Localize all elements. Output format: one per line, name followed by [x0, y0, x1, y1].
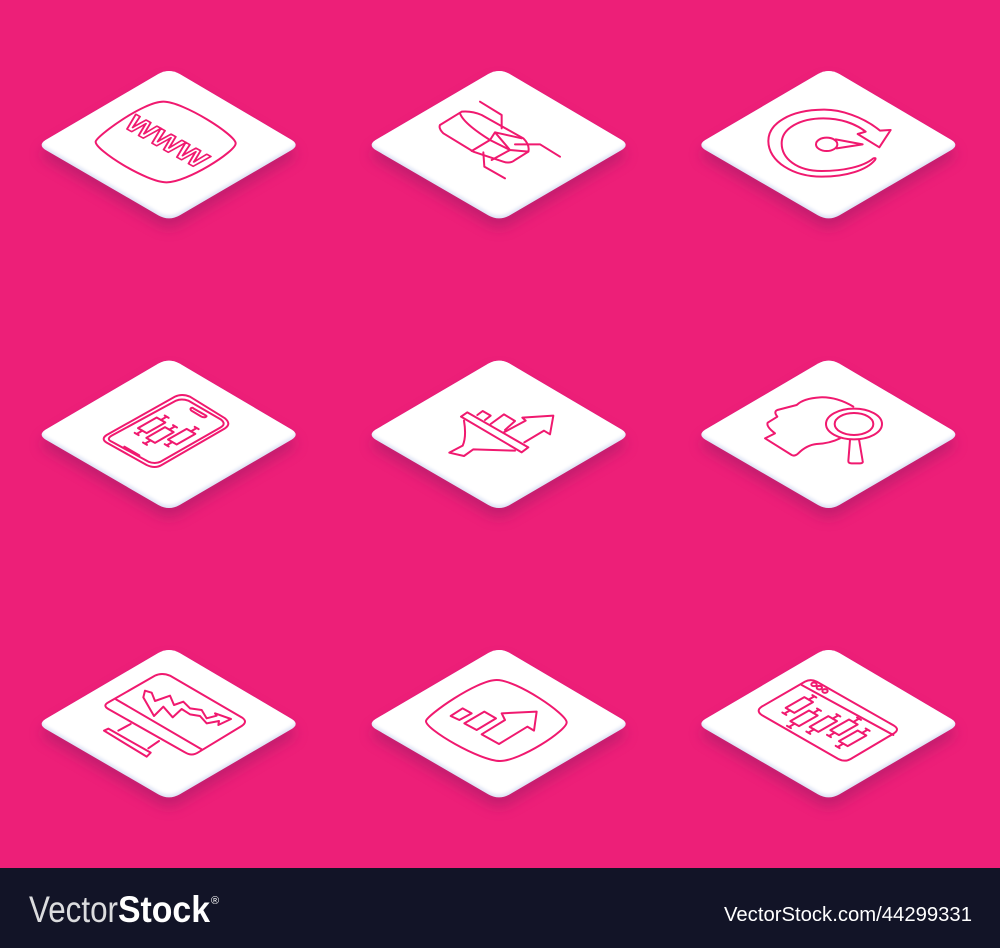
- icon: bars and arrow badge: [426, 680, 567, 761]
- footer bar: [0, 868, 1000, 948]
- icon: browser window with candlesticks: [759, 680, 897, 761]
- icon: www badge: www: [116, 105, 221, 175]
- icon: monitor with zigzag arrow: [104, 674, 245, 757]
- image id text: VectorStock.com/44299331: [724, 904, 972, 926]
- logo: VectorStock: ®: [211, 895, 219, 907]
- logo: VectorStock: [29, 889, 219, 930]
- logo: VectorStock: Stock: [118, 889, 210, 930]
- panel: speedometer tile: [701, 68, 955, 228]
- logo: VectorStock: Vector: [29, 889, 118, 930]
- icon: phone with candlesticks: [104, 395, 228, 467]
- panel: browser candlestick tile: [701, 647, 955, 807]
- panel: sales funnel tile: [372, 358, 626, 517]
- panel: www tile: [42, 68, 296, 228]
- panel: smartphone candlestick tile: [42, 358, 296, 517]
- icon: funnel with rising arrow: [449, 411, 553, 456]
- icon: head with magnifier: [765, 397, 882, 463]
- panel: head search tile: [701, 358, 955, 517]
- icon: gauge with circular arrow: [768, 110, 891, 177]
- icon: www badge: [96, 102, 236, 182]
- panel: growth chart tile: [372, 647, 626, 807]
- panel: pie chart tile: [372, 68, 626, 228]
- panel: monitor chart tile: [42, 647, 296, 807]
- icon: pie chart with callouts: [440, 102, 560, 178]
